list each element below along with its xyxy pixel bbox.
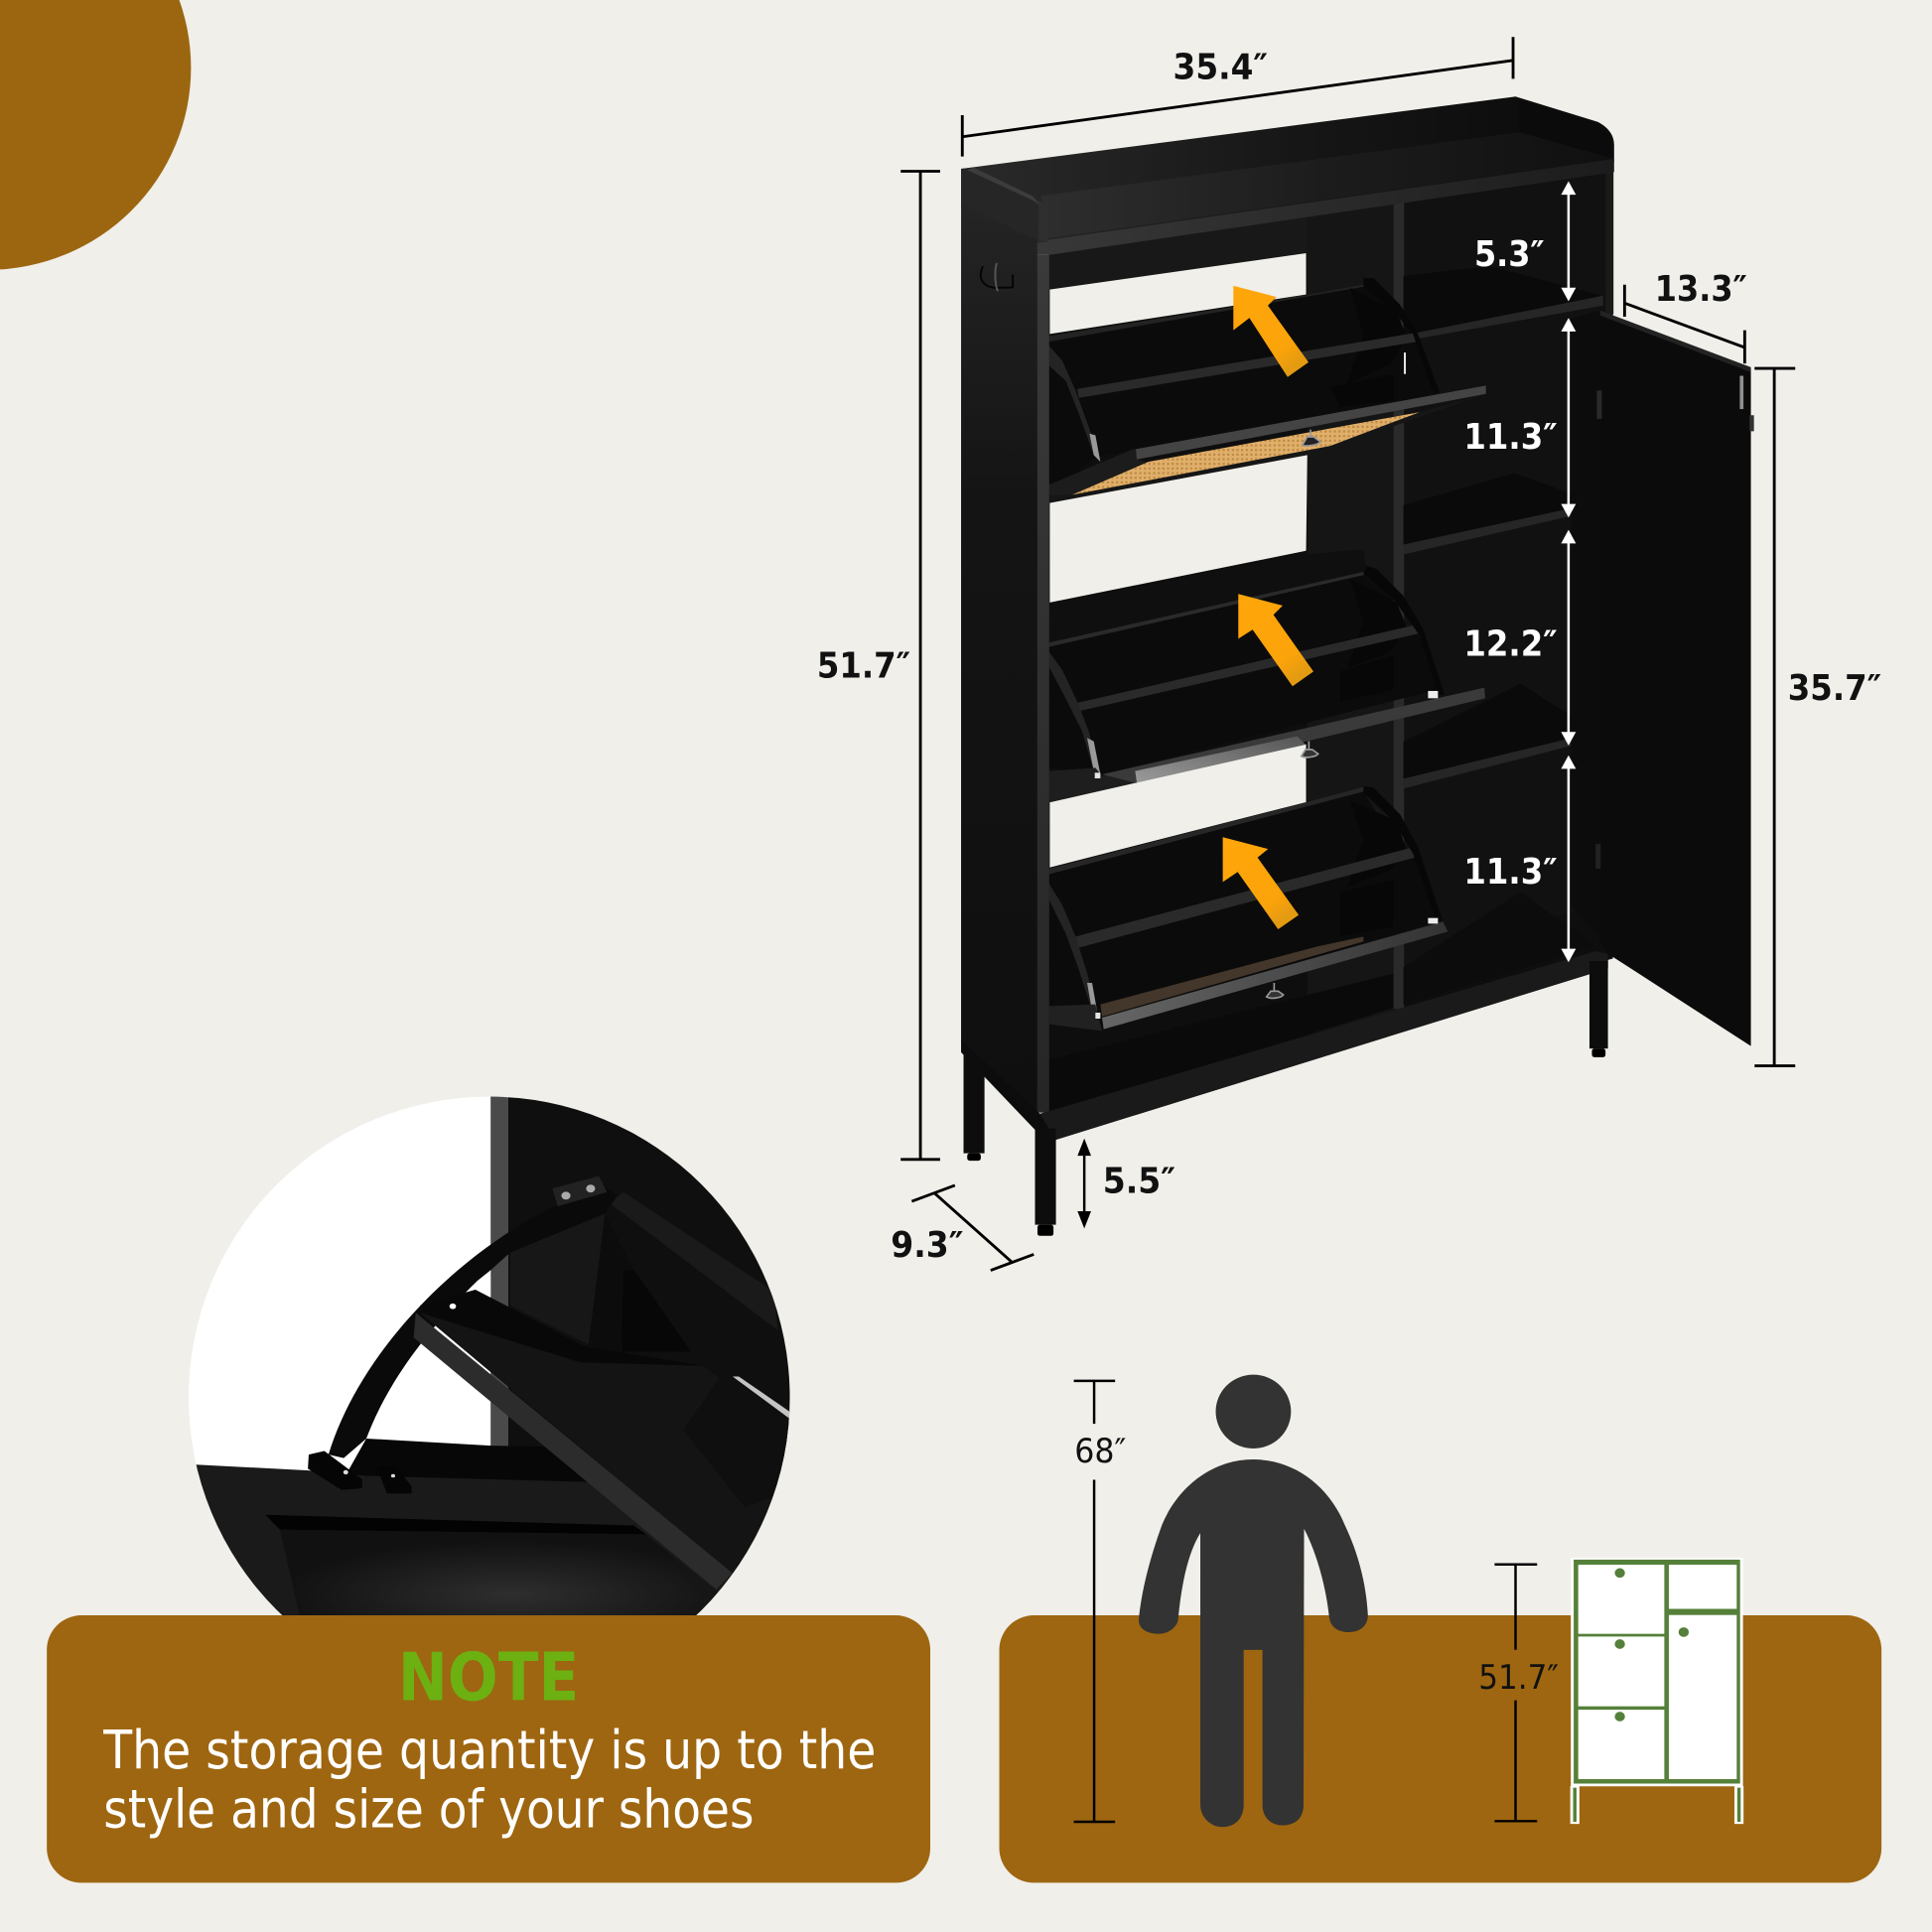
cabinet left side <box>961 205 1037 1115</box>
hopper 1 <box>1049 278 1486 503</box>
inner height arrows and labels: 12.2″ <box>1463 623 1558 664</box>
base frame and legs <box>961 951 1608 1236</box>
dimension: leg height 5.5: 5.5″ <box>1103 1161 1175 1201</box>
note heading: NOTE <box>398 1639 579 1717</box>
dimension: depth 9.3: 9.3″ <box>891 1225 964 1266</box>
panel: size comparison background <box>1000 1615 1881 1882</box>
note text: The storage quantity is up to the <box>102 1719 876 1781</box>
dimension: depth 9.3 <box>891 1185 1034 1271</box>
dimension: width 35.4 <box>962 37 1513 157</box>
cabinet body interior <box>1048 167 1613 1115</box>
note text: style and size of your shoes <box>103 1778 755 1841</box>
side hook <box>981 263 1013 291</box>
dimension: leg height 5.5 <box>1077 1139 1175 1228</box>
cabinet scale icon <box>1571 1558 1743 1824</box>
decorative corner circle <box>0 0 191 270</box>
person height measure: 68″ <box>1074 1432 1126 1470</box>
panel: note background <box>47 1615 930 1882</box>
flap with rattan <box>1049 385 1486 503</box>
inner height arrows and labels <box>1463 181 1576 962</box>
right compartment shelves <box>1394 198 1603 1009</box>
note text <box>102 1719 876 1841</box>
hopper 2 <box>1049 549 1485 802</box>
detail circle: flap hinge close-up <box>189 1096 790 1615</box>
shelf openings <box>1049 253 1308 868</box>
door <box>1571 311 1754 1046</box>
dimension: height 51.7 <box>817 172 940 1160</box>
orange arrows <box>1223 286 1313 929</box>
cabinet height measure: 51.7″ <box>1478 1658 1559 1697</box>
dimension: door width 13.3: 13.3″ <box>1655 269 1747 310</box>
dimension: door height 35.7: 35.7″ <box>1788 668 1881 709</box>
dimension: door height 35.7 <box>1754 368 1881 1066</box>
dimension: height 51.7: 51.7″ <box>817 646 910 687</box>
hopper 3 <box>1049 786 1448 1031</box>
dimension: door width 13.3 <box>1624 269 1747 363</box>
inner height arrows and labels: 5.3″ <box>1474 234 1545 275</box>
inner height arrows and labels: 11.3″ <box>1463 852 1558 893</box>
dimension: width 35.4: 35.4″ <box>1173 47 1268 87</box>
person silhouette <box>1139 1375 1368 1827</box>
person height measure <box>1074 1381 1126 1822</box>
cabinet height measure <box>1478 1565 1559 1821</box>
inner height arrows and labels: 11.3″ <box>1463 417 1558 458</box>
top tray <box>961 96 1614 255</box>
cabinet illustration <box>961 96 1754 1236</box>
